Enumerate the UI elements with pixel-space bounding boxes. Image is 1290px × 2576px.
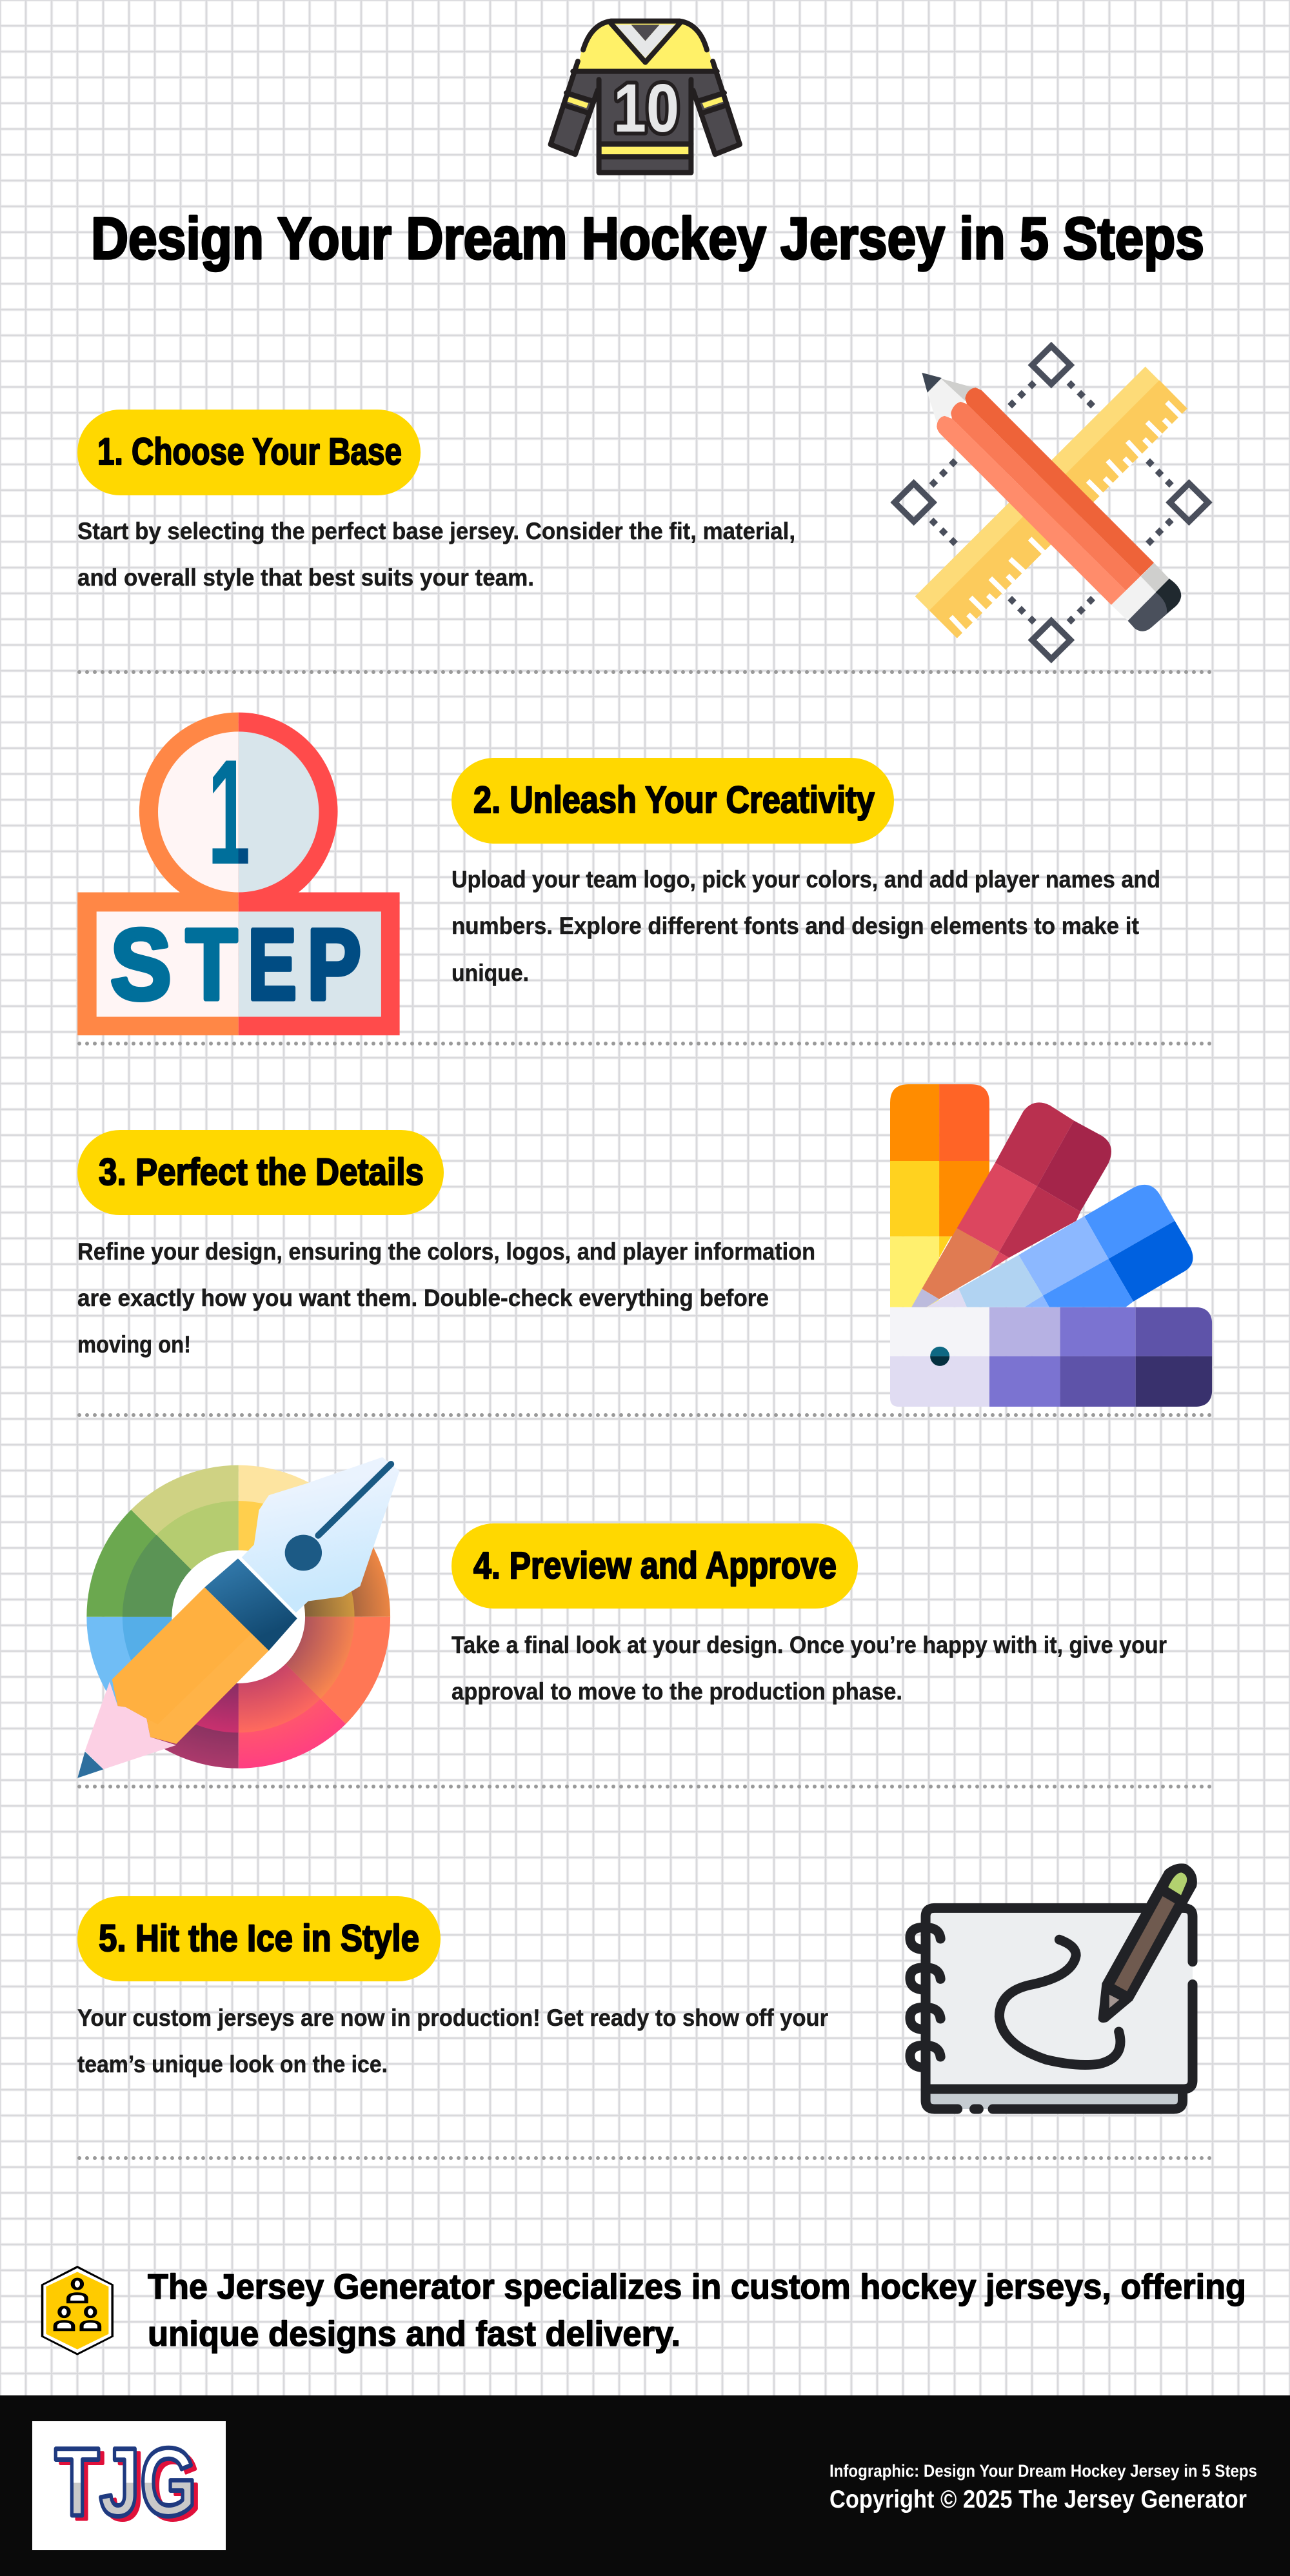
step 3 text: Refine your design, ensuring the colors, logos, and player information (77, 1238, 815, 1265)
step 5 text: Your custom jerseys are now in production! Get ready to show off your (77, 2005, 828, 2031)
step 3 text: are exactly how you want them. Double-check everything before (77, 1285, 769, 1311)
step 1 text: Start by selecting the perfect base jersey. Consider the fit, material, (77, 518, 795, 544)
divider 4 (79, 1785, 1213, 1788)
footer text: Copyright © 2025 The Jersey Generator (829, 2486, 1247, 2513)
panel: step 3 (77, 1084, 1212, 1407)
step 3 heading: 3. Perfect the Details (99, 1151, 424, 1193)
icon: one step badge: P (307, 909, 361, 1021)
step 5 heading (77, 1896, 441, 1981)
divider 3 (79, 1413, 1213, 1417)
statement text: The Jersey Generator specializes in custom hockey jerseys, offering (148, 2266, 1246, 2306)
icon: one step badge: S (110, 909, 172, 1021)
logo: TJG: TJG (55, 2428, 197, 2536)
logo: TJG: TJG (59, 2432, 201, 2540)
footer text (829, 2461, 1257, 2513)
step 5 text: team’s unique look on the ice. (77, 2051, 388, 2077)
step 4 heading: 4. Preview and Approve (473, 1545, 837, 1587)
icon: hockey jersey (551, 21, 740, 173)
step 1 heading: 1. Choose Your Base (97, 431, 402, 473)
jersey number: 10 (613, 70, 679, 146)
logo: TJG (32, 2421, 226, 2550)
icon: one step badge: 1 (208, 729, 250, 896)
icon: one step badge (77, 713, 400, 1035)
step 2 heading: 2. Unleash Your Creativity (473, 779, 875, 821)
step 3 text (77, 1238, 815, 1358)
step 2 text: Upload your team logo, pick your colors, and add player names and (452, 866, 1160, 893)
panel: step 1 (77, 342, 1213, 663)
divider 1 (79, 670, 1213, 674)
icon: sketchbook and pencil (910, 1863, 1197, 2109)
divider 5 (79, 2156, 1213, 2160)
step 4 heading (452, 1523, 858, 1609)
step 2 text (452, 866, 1160, 986)
step 3 heading (77, 1130, 444, 1215)
step 2 text: numbers. Explore different fonts and design elements to make it (452, 913, 1139, 939)
step 4 text: approval to move to the production phase. (452, 1678, 902, 1705)
panel: step 5 (77, 1863, 1197, 2109)
step 1 text (77, 518, 795, 591)
statement text: unique designs and fast delivery. (148, 2313, 680, 2353)
icon: team hexagon (41, 2266, 114, 2355)
statement text (148, 2266, 1246, 2353)
step 3 text: moving on! (77, 1331, 191, 1358)
icon: colour wheel with pen and pencil (77, 1457, 400, 1778)
icon: pencil and ruler (890, 342, 1213, 663)
icon: one step badge: E (248, 909, 297, 1021)
step 2 heading (452, 758, 894, 844)
icon: colour swatch fan (890, 1084, 1212, 1407)
step 1 heading (77, 410, 421, 495)
step 4 text (452, 1632, 1167, 1705)
callout: company statement (41, 2266, 1246, 2355)
step 5 heading: 5. Hit the Ice in Style (99, 1917, 419, 1959)
step 1 text: and overall style that best suits your team. (77, 564, 534, 591)
step 4 text: Take a final look at your design. Once you’re happy with it, give your (452, 1632, 1167, 1658)
panel: step 4 (77, 1457, 1167, 1778)
divider 2 (79, 1042, 1213, 1045)
footer (0, 2395, 1290, 2576)
step 2 text: unique. (452, 960, 529, 986)
step 5 text (77, 2005, 828, 2077)
panel: step 2 (77, 713, 1160, 1035)
icon: one step badge: T (186, 909, 237, 1021)
